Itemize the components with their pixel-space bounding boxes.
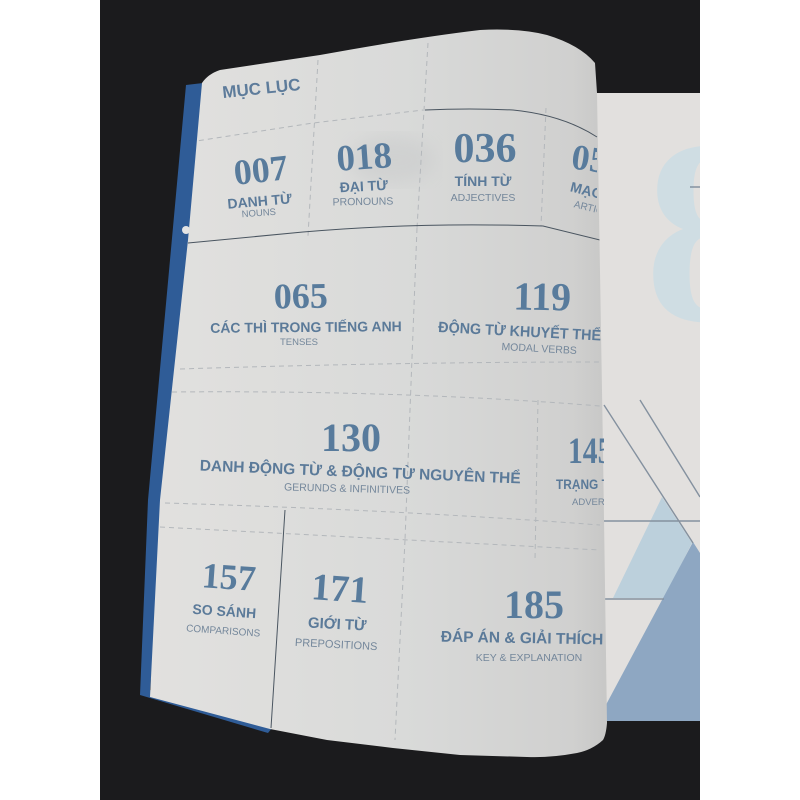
entry: prepositions: 171 <box>310 566 370 612</box>
entry: adjectives: ADJECTIVES <box>451 192 515 204</box>
entry: adverbs, partly hidden by the page curve: ADVERBS <box>572 497 617 508</box>
entry: pronouns: ĐẠI TỪ <box>339 176 389 195</box>
front page <box>140 20 620 770</box>
entry: tenses <box>210 276 402 348</box>
entry: adjectives: TÍNH TỪ <box>455 172 512 189</box>
entry: pronouns: 018 <box>335 135 393 180</box>
title: MỤC LỤC <box>221 75 301 102</box>
large pale numeral: 8 <box>644 87 776 377</box>
entry: adverbs, partly hidden by the page curve: 145 <box>568 431 612 472</box>
entry: tenses: CÁC THÌ TRONG TIẾNG ANH <box>210 318 402 336</box>
entry: adjectives <box>451 126 516 204</box>
entry: modal verbs: MODAL VERBS <box>501 341 577 357</box>
dark background <box>100 0 700 800</box>
entry: articles, partly hidden by the page curve <box>569 137 628 222</box>
entry: nouns: DANH TỪ <box>227 189 293 212</box>
entry: prepositions <box>295 566 378 653</box>
entry: comparisons <box>186 555 261 640</box>
entry: tenses: TENSES <box>280 337 318 348</box>
entry: adjectives: 036 <box>454 126 516 172</box>
entry: adverbs, partly hidden by the page curve <box>556 431 619 508</box>
entry: key and explanation: KEY & EXPLANATION <box>476 652 582 664</box>
entry: pronouns: PRONOUNS <box>333 195 393 209</box>
entry: comparisons: COMPARISONS <box>186 623 261 640</box>
entry: prepositions: PREPOSITIONS <box>295 637 378 653</box>
panel rule lines <box>188 109 600 728</box>
entry: modal verbs: 119 <box>513 274 572 320</box>
entry: articles, partly hidden by the page curve: MẠO TỪ <box>569 178 628 208</box>
entry: comparisons: SO SÁNH <box>192 601 257 621</box>
cover hole <box>182 226 190 234</box>
entry: comparisons: 157 <box>201 555 257 599</box>
entry: articles, partly hidden by the page curve: 051 <box>569 137 628 184</box>
entry: nouns: 007 <box>232 147 290 193</box>
blue triangle <box>600 542 700 721</box>
outline triangle lines <box>600 187 700 599</box>
entry: gerunds and infinitives <box>199 415 521 497</box>
entry: gerunds and infinitives: 130 <box>321 415 381 460</box>
blue book cover <box>140 83 272 733</box>
entry: prepositions: GIỚI TỪ <box>308 613 368 635</box>
entry: key and explanation <box>441 582 603 664</box>
entry: key and explanation: 185 <box>504 582 564 627</box>
entry: modal verbs: ĐỘNG TỪ KHUYẾT THỂ <box>438 318 602 345</box>
pale triangle <box>613 497 692 598</box>
entry: nouns: NOUNS <box>241 207 276 220</box>
entry: pronouns <box>333 135 393 209</box>
entry: adverbs, partly hidden by the page curve: TRẠNG TỪ <box>556 476 619 492</box>
entry: nouns <box>227 147 293 220</box>
entry: gerunds and infinitives: DANH ĐỘNG TỪ & ĐỘNG TỪ NGUYÊN THỂ <box>199 457 521 487</box>
entry: key and explanation: ĐÁP ÁN & GIẢI THÍCH <box>441 629 603 648</box>
entry: gerunds and infinitives: GERUNDS & INFINITIVES <box>284 481 410 497</box>
entry: modal verbs <box>438 274 602 357</box>
entry: tenses: 065 <box>273 276 328 316</box>
back page <box>597 93 700 721</box>
entry: articles, partly hidden by the page curve: ARTICLES <box>573 199 623 222</box>
